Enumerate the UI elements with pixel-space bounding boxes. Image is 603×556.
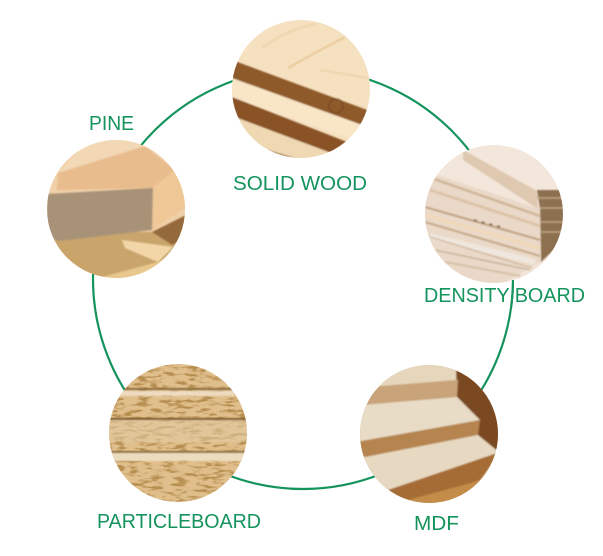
panel: MDF bbox=[360, 365, 498, 530]
label: density board: DENSITY BOARD bbox=[424, 285, 585, 307]
photo: MDF steps bbox=[360, 365, 498, 503]
label: solid wood: SOLID WOOD bbox=[233, 173, 367, 195]
label: MDF: MDF bbox=[414, 513, 459, 535]
label: particleboard: PARTICLEBOARD bbox=[97, 511, 261, 533]
ring segment crossing the label bbox=[511, 280, 513, 308]
panel: solid wood bbox=[230, 20, 370, 195]
photo: solid wood boards bbox=[230, 20, 370, 160]
panel: particleboard bbox=[97, 363, 261, 533]
photo: pine beam bbox=[46, 139, 190, 280]
panel: pine bbox=[46, 113, 190, 280]
label: pine: PINE bbox=[89, 113, 134, 135]
green connecting ring bbox=[93, 69, 513, 489]
photo: layered density board bbox=[424, 144, 564, 285]
photo: particleboard layers bbox=[108, 363, 248, 503]
panel: density board bbox=[424, 144, 585, 308]
